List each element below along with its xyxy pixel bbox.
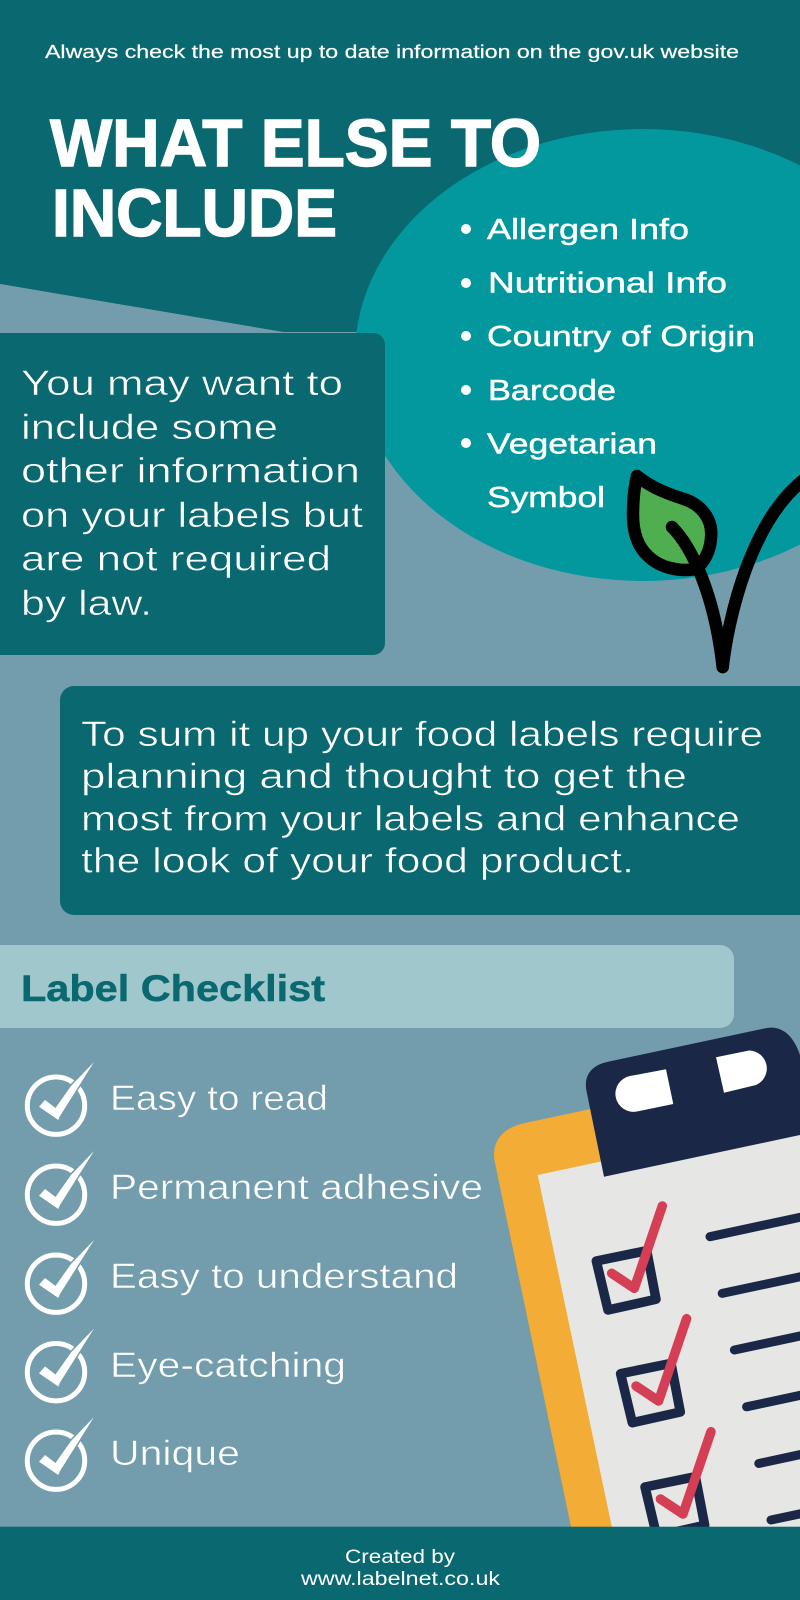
panel: summary text box: most from your labels and enhance — [81, 800, 740, 838]
checklist heading bar — [0, 945, 734, 1028]
icon: check circle 4 — [27, 1328, 94, 1401]
list: optional label information: Country of Origin — [487, 321, 755, 353]
panel: optional information text box: include some — [21, 408, 278, 447]
panel: summary text box: To sum it up your food labels require — [81, 715, 763, 754]
panel: optional information text box — [0, 333, 385, 655]
footer — [0, 1527, 800, 1600]
panel: optional information text box: other information — [21, 452, 360, 491]
icon: check circle 5 — [27, 1417, 94, 1489]
title — [50, 106, 541, 251]
panel: optional information text box: on your labels but — [21, 496, 363, 535]
panel: summary text box — [60, 686, 800, 915]
panel: summary text box: planning and thought to get the — [81, 757, 687, 796]
list: optional label information: Symbol — [487, 482, 605, 514]
wedge: light triangle under header — [0, 284, 283, 332]
panel: top dark header shape — [0, 0, 800, 332]
checklist items text — [110, 1079, 483, 1473]
teal circle — [355, 129, 800, 581]
checklist heading bar: Label Checklist — [21, 968, 325, 1009]
panel: summary text box: the look of your food product. — [81, 842, 634, 880]
icon: check circle 2 — [27, 1151, 94, 1223]
panel: optional information text box: are not required — [21, 540, 331, 578]
list: optional label information: Nutritional Info — [488, 268, 727, 300]
checklist items text: Unique — [110, 1434, 240, 1473]
title: WHAT ELSE TO — [50, 106, 541, 181]
title: INCLUDE — [52, 176, 337, 251]
list: optional label information: Vegetarian — [487, 428, 657, 460]
list: optional label information: Allergen Info — [487, 214, 689, 246]
icon: check circle 3 — [27, 1240, 94, 1312]
checklist items text: Permanent adhesive — [110, 1168, 483, 1207]
checklist items text: Easy to understand — [110, 1257, 458, 1296]
list: optional label information — [461, 214, 755, 514]
icon: vegetarian leaf symbol — [633, 476, 800, 667]
checklist items text: Eye-catching — [110, 1346, 346, 1385]
checklist items text: Easy to read — [110, 1079, 328, 1118]
notice text: Always check the most up to date information on the gov.uk website — [45, 41, 739, 62]
panel: optional information text box: by law. — [21, 584, 152, 623]
footer: www.labelnet.co.uk — [300, 1568, 500, 1590]
illustration: clipboard — [494, 1028, 800, 1536]
icon: check circle 1 — [27, 1062, 94, 1134]
list: optional label information: Barcode — [488, 375, 616, 407]
panel: optional information text box: You may want to — [21, 364, 343, 403]
footer: Created by — [345, 1546, 455, 1568]
